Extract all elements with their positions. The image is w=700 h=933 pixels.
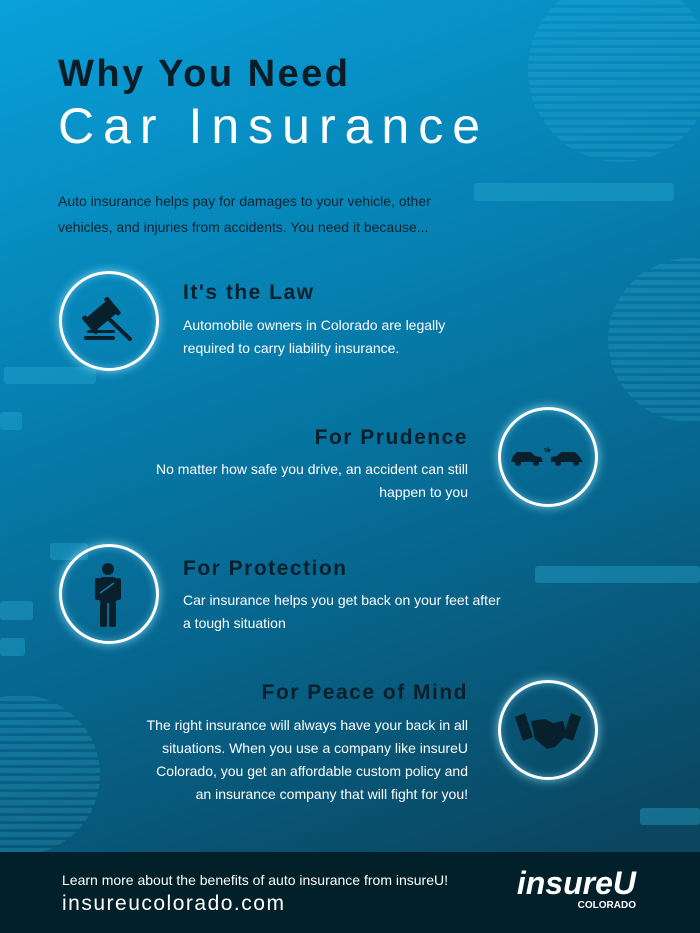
footer text: Learn more about the benefits of auto insurance from insureU! xyxy=(62,872,448,888)
logo: insureU xyxy=(517,865,636,901)
title xyxy=(58,53,489,154)
title: Why You Need xyxy=(58,53,351,95)
heading: For Peace of Mind xyxy=(262,681,468,704)
title: Car Insurance xyxy=(58,98,489,154)
text: Car insurance helps you get back on your feet after a tough situation xyxy=(183,592,501,631)
logo: COLORADO xyxy=(578,900,636,911)
text: No matter how safe you drive, an accident can still happen to you xyxy=(156,461,468,500)
footer url: insureucolorado.com xyxy=(62,892,285,915)
intro text: Auto insurance helps pay for damages to your vehicle, other vehicles, and injuries from accidents. You need it because... xyxy=(58,193,431,235)
text: The right insurance will always have your back in all situations. When you use a company like insureU Colorado, you get an affordable custom policy and an insurance company that will fight for you! xyxy=(147,717,468,802)
panel: peace of mind xyxy=(146,674,605,802)
panel: protection xyxy=(52,538,501,650)
panel: law xyxy=(52,264,446,378)
text: Automobile owners in Colorado are legally required to carry liability insurance. xyxy=(183,317,445,356)
heading: For Prudence xyxy=(315,426,468,449)
icon: gavel xyxy=(59,271,159,371)
icon: injured person xyxy=(59,544,159,644)
icon: handshake xyxy=(498,680,598,780)
heading: It's the Law xyxy=(183,281,315,304)
heading: For Protection xyxy=(183,557,348,580)
icon: cars xyxy=(498,407,598,507)
footer xyxy=(0,852,700,933)
panel: prudence xyxy=(156,400,604,514)
